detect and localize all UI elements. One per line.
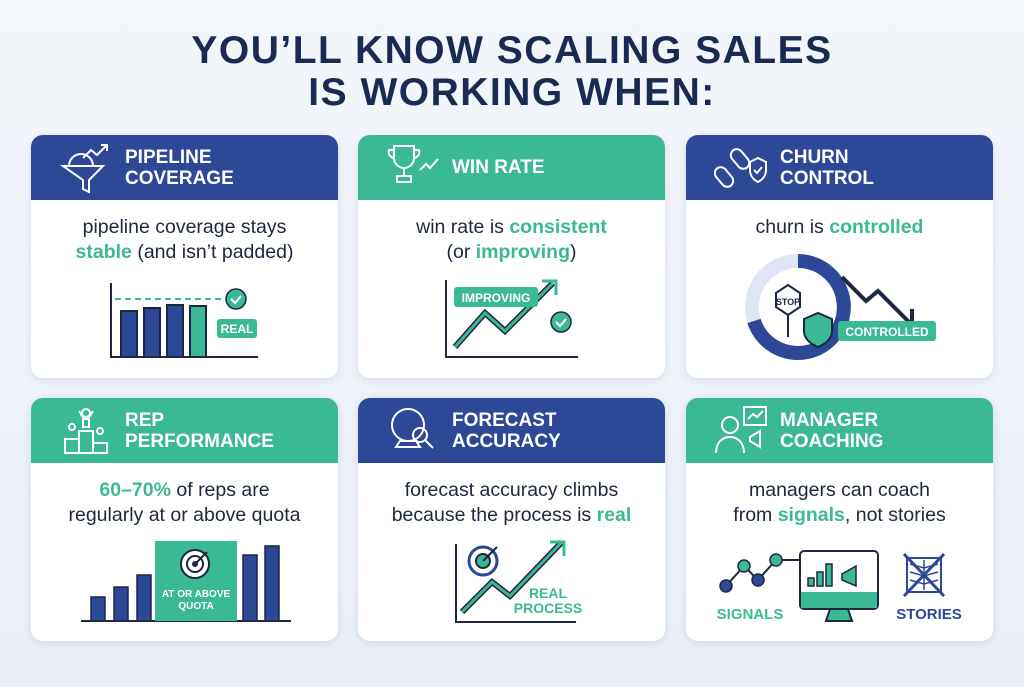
text bbox=[416, 216, 607, 263]
chart: donut and down arrow: STOP bbox=[776, 297, 800, 307]
header: win rate: WIN RATE bbox=[452, 157, 545, 178]
text: because the process is real bbox=[392, 504, 631, 526]
icon: manager with chart bbox=[715, 406, 767, 453]
chart: signals, monitor, stories: SIGNALS bbox=[717, 606, 783, 623]
text: stable (and isn’t padded) bbox=[76, 241, 293, 263]
chart: quota bars: AT OR ABOVE bbox=[162, 589, 230, 600]
text: 60–70% of reps are bbox=[99, 479, 270, 501]
panel: pipeline coverage bbox=[31, 135, 338, 378]
header: rep performance: PERFORMANCE bbox=[125, 431, 274, 452]
title: YOU’LL KNOW SCALING SALES bbox=[191, 29, 833, 72]
chart: target and rising line: REAL bbox=[529, 585, 567, 601]
text: win rate is consistent bbox=[416, 216, 607, 238]
chart: improving line bbox=[445, 280, 578, 358]
text bbox=[68, 479, 300, 526]
header: win rate bbox=[358, 135, 665, 200]
chart: donut and down arrow bbox=[745, 254, 936, 360]
header: pipeline coverage: COVERAGE bbox=[125, 168, 234, 189]
header: churn control bbox=[686, 135, 993, 200]
panel: manager coaching bbox=[686, 398, 993, 641]
text: from signals, not stories bbox=[733, 504, 946, 526]
icon: crystal ball bbox=[391, 408, 434, 449]
text: pipeline coverage stays bbox=[83, 216, 286, 238]
icon: funnel bbox=[60, 144, 108, 194]
chart: donut and down arrow: CONTROLLED bbox=[845, 325, 929, 339]
title bbox=[191, 29, 833, 114]
panel: forecast accuracy bbox=[358, 398, 665, 641]
title: IS WORKING WHEN: bbox=[308, 71, 716, 114]
chart: bars bbox=[110, 283, 258, 358]
header: manager coaching bbox=[686, 398, 993, 463]
header: rep performance: REP bbox=[125, 410, 164, 431]
text: (or improving) bbox=[446, 241, 576, 263]
icon: broken chain and shield bbox=[714, 148, 767, 188]
header: churn control: CONTROL bbox=[780, 168, 874, 189]
chart: signals, monitor, stories: STORIES bbox=[896, 606, 962, 623]
header: forecast accuracy: FORECAST bbox=[452, 410, 556, 431]
chart: quota bars bbox=[81, 541, 291, 622]
icon: podium people bbox=[64, 408, 108, 454]
panel: churn control bbox=[686, 135, 993, 378]
header: manager coaching: MANAGER bbox=[780, 410, 878, 431]
text: forecast accuracy climbs bbox=[405, 479, 618, 501]
header: churn control: CHURN bbox=[780, 147, 849, 168]
header: forecast accuracy bbox=[358, 398, 665, 463]
header: rep performance bbox=[31, 398, 338, 463]
chart: quota bars: QUOTA bbox=[178, 601, 214, 612]
chart: target and rising line: PROCESS bbox=[514, 600, 582, 616]
chart: improving line: IMPROVING bbox=[462, 291, 530, 305]
text bbox=[392, 479, 631, 526]
header: pipeline coverage bbox=[31, 135, 338, 200]
chart: signals, monitor, stories bbox=[717, 550, 962, 623]
text: churn is controlled bbox=[756, 216, 923, 238]
text: managers can coach bbox=[749, 479, 930, 501]
text bbox=[733, 479, 946, 526]
panel: rep performance bbox=[31, 398, 338, 641]
panel: win rate bbox=[358, 135, 665, 378]
text bbox=[76, 216, 293, 263]
chart: bars: REAL bbox=[221, 322, 253, 336]
text: regularly at or above quota bbox=[68, 504, 300, 526]
chart: target and rising line bbox=[455, 540, 582, 623]
header: pipeline coverage: PIPELINE bbox=[125, 147, 212, 168]
icon: trophy bbox=[388, 145, 439, 183]
header: manager coaching: COACHING bbox=[780, 431, 883, 452]
header: forecast accuracy: ACCURACY bbox=[452, 431, 561, 452]
